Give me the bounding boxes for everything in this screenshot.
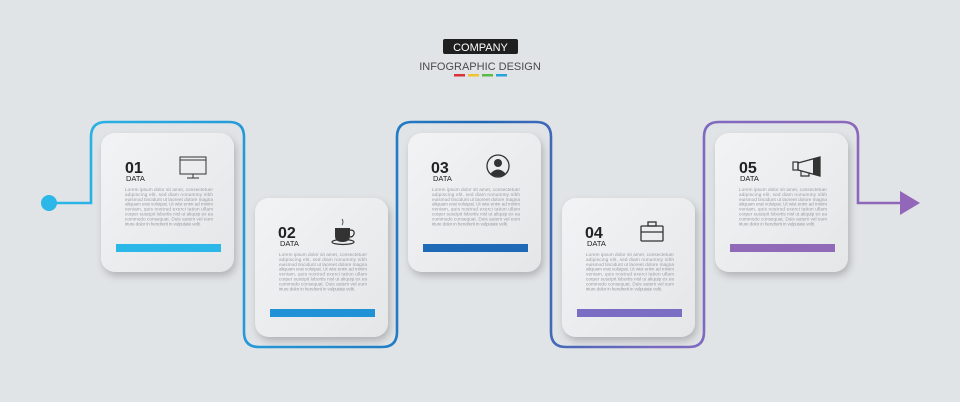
icon: coffee cup [332, 219, 354, 244]
subtitle: INFOGRAPHIC DESIGN [419, 61, 541, 73]
card 03: DATA [433, 174, 452, 183]
card 01: 01 [125, 160, 143, 177]
header [419, 39, 541, 76]
card 03: 03 [431, 160, 449, 177]
color dashes [454, 74, 507, 76]
icon: person [487, 155, 509, 177]
icon: monitor [180, 157, 206, 178]
card 04: 04 [585, 225, 603, 242]
card 05 [715, 133, 848, 272]
card 01 [101, 133, 234, 272]
card 02: DATA [280, 239, 299, 248]
card 05: 05 [739, 160, 757, 177]
company badge: COMPANY [453, 42, 509, 54]
icon: briefcase [641, 222, 663, 241]
connector line [49, 122, 903, 347]
arrow head [900, 191, 920, 215]
icon: megaphone [793, 157, 820, 176]
card 01: DATA [126, 174, 145, 183]
card 04 [562, 198, 695, 337]
card 02 [255, 198, 388, 337]
start dot [41, 195, 57, 211]
card 04: DATA [587, 239, 606, 248]
card 02: 02 [278, 225, 296, 242]
card 03 [408, 133, 541, 272]
card 05: DATA [740, 174, 759, 183]
